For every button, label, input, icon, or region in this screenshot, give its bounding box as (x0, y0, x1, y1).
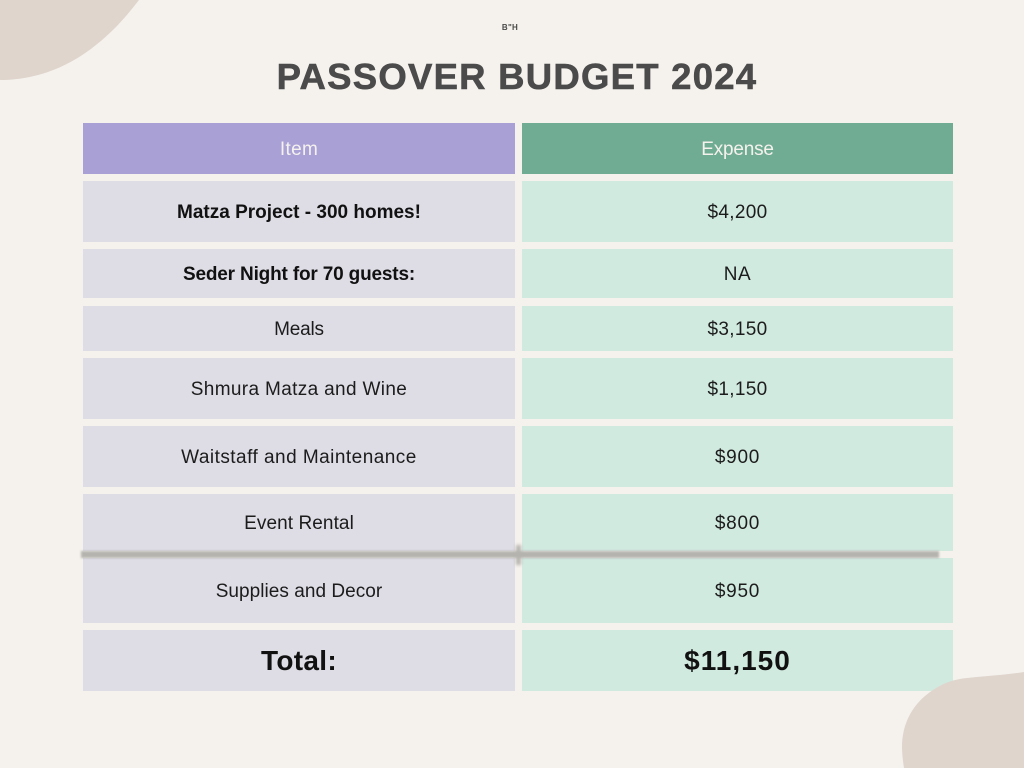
row: seder night value (522, 249, 953, 298)
row: seder night label: Seder Night for 70 guests: (183, 264, 415, 284)
row: matza project value (522, 181, 953, 242)
row: event rental label (83, 494, 515, 551)
row: meals label: Meals (274, 318, 324, 340)
row: total value (522, 630, 953, 691)
small header mark: B"H (502, 23, 518, 32)
row: shmura matza value: $1,150 (708, 378, 767, 400)
decorative blob: bottom right (902, 672, 1024, 768)
row: waitstaff value (522, 426, 953, 487)
row: supplies value (522, 558, 953, 623)
row: seder night label (83, 249, 515, 298)
row: shmura matza value (522, 358, 953, 419)
row: shmura matza label: Shmura Matza and Wine (191, 378, 407, 400)
row: total label (83, 630, 515, 691)
row: total value: $11,150 (684, 645, 791, 676)
header: expense (522, 123, 953, 174)
row: waitstaff label: Waitstaff and Maintenance (181, 446, 417, 468)
row: seder night value: NA (724, 264, 751, 284)
title: PASSOVER BUDGET 2024 (277, 56, 757, 97)
row: supplies label (83, 558, 515, 623)
blurred horizontal rule (81, 551, 939, 558)
row: matza project value: $4,200 (708, 202, 767, 222)
header: expense: Expense (701, 138, 774, 160)
decorative blob: top left (0, 0, 139, 80)
row: supplies value: $950 (715, 580, 760, 602)
row: supplies label: Supplies and Decor (216, 580, 382, 602)
header: item (83, 123, 515, 174)
row: meals value (522, 306, 953, 351)
blurred tick at column gap (516, 545, 521, 565)
row: waitstaff value: $900 (715, 446, 760, 468)
row: event rental value: $800 (715, 512, 760, 534)
row: matza project label: Matza Project - 300 homes! (177, 202, 421, 222)
row: meals label (83, 306, 515, 351)
row: waitstaff label (83, 426, 515, 487)
row: total label: Total: (261, 645, 337, 676)
row: shmura matza label (83, 358, 515, 419)
header: item: Item (280, 138, 318, 160)
row: event rental label: Event Rental (244, 512, 354, 534)
row: event rental value (522, 494, 953, 551)
row: matza project label (83, 181, 515, 242)
row: meals value: $3,150 (708, 318, 767, 340)
